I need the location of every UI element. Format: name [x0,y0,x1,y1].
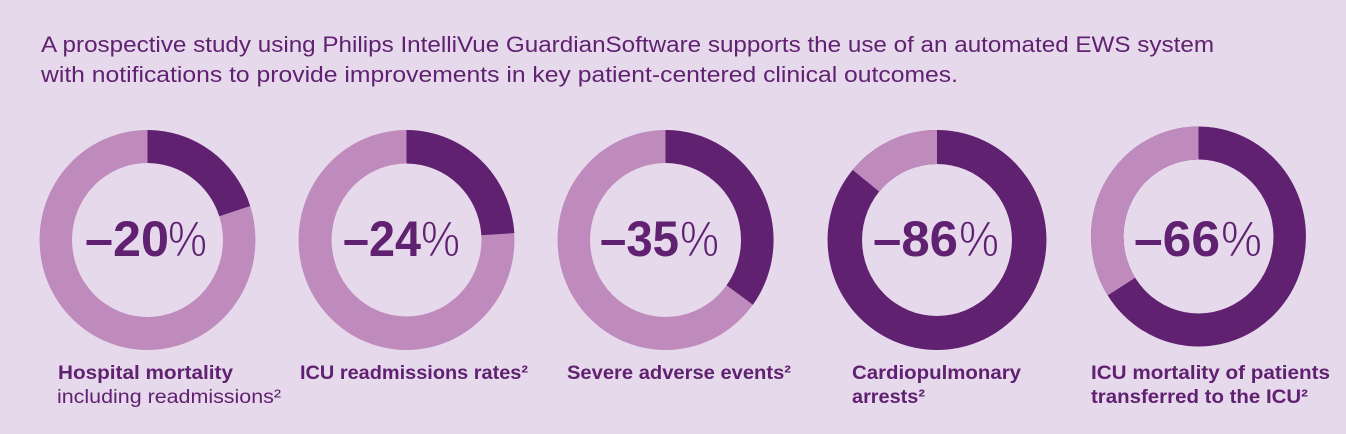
label: hospital mortality [57,363,281,408]
donut chart: -35% [558,130,774,350]
value: -66%: –66 [1134,211,1220,267]
value: -86%: % [959,211,999,267]
value: -24%: –24 [343,211,421,267]
panel: ICU readmissions [299,130,528,384]
donut chart: -24% [299,130,514,350]
value: -66% [1134,211,1262,267]
panel: hospital mortality [40,130,281,408]
heading text: with notifications to provide improvements in key patient-centered clinical outcomes. [40,62,958,87]
donut chart: -86% [828,130,1046,350]
donut chart: -20% [40,130,255,350]
label: hospital mortality: Hospital mortality [58,363,233,384]
heading text [40,32,1214,87]
value: -66%: % [1221,211,1262,267]
panel: ICU mortality [1091,126,1330,408]
value: -20%: –20 [85,211,169,267]
label: hospital mortality: including readmissions² [57,387,281,408]
value: -35%: –35 [600,211,679,267]
label: cardiopulmonary arrests: Cardiopulmonary [852,363,1021,384]
value: -24%: % [421,211,460,267]
label: cardiopulmonary arrests: arrests² [852,387,925,408]
panel: cardiopulmonary arrests [828,130,1046,408]
donut chart: -66% [1091,126,1306,346]
value: -20%: % [168,211,207,267]
value: -86% [873,211,999,267]
heading text: A prospective study using Philips IntelliVue GuardianSoftware supports the use of an automated EWS system [41,32,1214,57]
value: -86%: –86 [873,211,958,267]
label: ICU mortality of patients: transferred to the ICU² [1091,387,1308,408]
label: ICU mortality of patients [1091,363,1330,408]
label: severe adverse events: Severe adverse events² [567,363,791,384]
label: cardiopulmonary arrests [852,363,1021,408]
label: ICU readmissions rates: ICU readmissions rates² [300,363,528,384]
value: -20% [85,211,207,267]
panel: severe adverse events [558,130,791,384]
value: -35%: % [680,211,719,267]
label: ICU mortality of patients: ICU mortality of patients [1091,363,1330,384]
